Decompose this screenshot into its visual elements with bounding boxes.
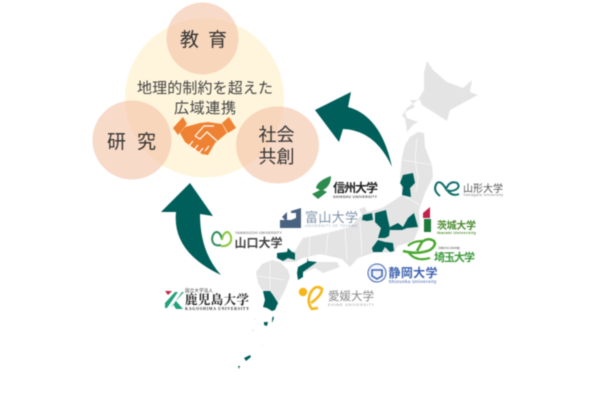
logo: Yamaguchi University (212, 231, 283, 250)
circle: research (92, 100, 172, 180)
map: highlighted prefectures (238, 173, 418, 369)
logo: Yamaguchi University: YAMAGUCHI UNIVERSITY (235, 231, 283, 235)
map of Japan (238, 61, 478, 369)
logo: Kagoshima University (165, 287, 249, 311)
circle: society: 共創 (258, 147, 294, 167)
arrow: lower left, pointing up to diagram (161, 183, 221, 275)
logo: Yamagata University: 山形大学 (463, 182, 503, 195)
circle: education: 教 育 (180, 29, 227, 51)
logo: Yamagata University (435, 182, 503, 197)
icon: blue round emblem (368, 264, 386, 282)
logo: Ibaraki University: 茨城大学 (437, 219, 476, 232)
icon: teal leaf (435, 182, 459, 196)
logo: Kagoshima University: KAGOSHIMA UNIVERSITY (185, 306, 249, 311)
logo: Saitama University: 埼玉大学 (434, 250, 475, 264)
logo: Yamagata University: Yamagata University (463, 193, 503, 197)
logo: Shinshu University (312, 176, 378, 199)
circle: society: 社会 (258, 125, 294, 145)
logo: Kagoshima University: 鹿児島大学 (185, 292, 249, 307)
icon: green wing (312, 176, 331, 199)
logo: Saitama University: Saitama University (438, 246, 460, 250)
circle diagram (92, 2, 319, 184)
map: prefecture borders (258, 138, 432, 290)
icon: yellow dot and curve (299, 288, 307, 296)
arrow: upper right, pointing to diagram (315, 92, 392, 167)
icon: green swirl (403, 239, 435, 253)
central text (137, 80, 273, 117)
logo: Saitama University (403, 239, 475, 264)
icon: green K mark (165, 291, 172, 295)
logo: Kagoshima University: 国立大学法人 (185, 287, 214, 294)
logo: Yamaguchi University: 山口大学 (234, 235, 282, 250)
logo: Shizuoka University: 静岡大学 (388, 265, 438, 280)
logo: University of Toyama: UNIVERSITY OF TOYAMA (305, 224, 358, 228)
logo: Ehime University: 愛媛大学 (328, 289, 374, 303)
logo: Shinshu University: 信州大学 (333, 180, 378, 195)
logo: Shinshu University: SHINSHU UNIVERSITY (333, 195, 378, 199)
logo: Ehime University (299, 287, 374, 309)
logo: Shizuoka University (368, 264, 438, 284)
background circle (125, 18, 284, 178)
logo: University of Toyama (280, 208, 358, 228)
circle: society (236, 106, 319, 184)
icon: handshake (173, 117, 236, 155)
central text: 広域連携 (174, 100, 236, 117)
logo: Ibaraki University (423, 207, 477, 235)
logo: Ehime University: EHIME UNIVERSITY (328, 303, 374, 307)
map: gray landmass (252, 61, 478, 347)
logo: Ibaraki University: Ibaraki University (437, 230, 477, 235)
circle: education (166, 2, 238, 74)
central text: 地理的制約を超えた (137, 80, 273, 97)
icon: blue emblem (282, 212, 287, 222)
logo: Shizuoka University: Shizuoka University (388, 279, 437, 284)
icon: red and green bars (423, 207, 430, 218)
circle: research: 研 究 (107, 131, 156, 153)
logo: University of Toyama: 富山大学 (305, 210, 358, 225)
icon: green Y mark (212, 232, 222, 245)
